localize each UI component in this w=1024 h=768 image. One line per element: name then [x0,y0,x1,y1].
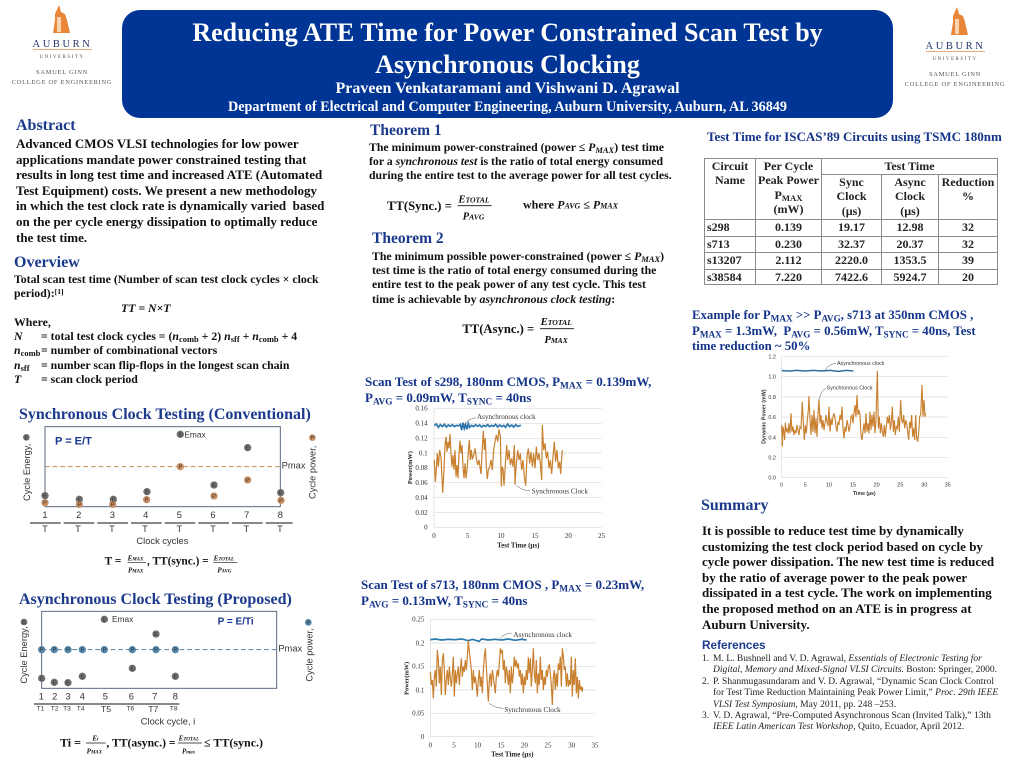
text: abstract body: applications mandate power constrained testing that [16,152,306,167]
chart: synchronous clock schematic: E [43,494,47,500]
chart: asynchronous clock schematic: E [22,620,26,626]
formula: sync test time: EMAX [127,554,144,562]
table: test time results: (mW) [774,202,804,216]
text: abstract body: in which the test clock rate is dynamically varied based [16,198,324,213]
line: async clock [430,639,527,641]
heading: s298 scan test: PAVG = 0.09mW, TSYNC = 40ns [365,390,531,407]
chart: s298 power vs time: 0.16 [415,405,428,413]
text: abstract body [16,136,324,245]
chart: asynchronous clock schematic: E [173,674,177,680]
chart: synchronous clock schematic: 5 [177,510,182,520]
chart: synchronous clock schematic: P [279,498,283,504]
text: abstract body: Advanced CMOS VLSI technologies for low power [16,136,299,151]
table: test time results: 32 [962,237,974,251]
text: summary body: by the ratio of average power to the peak power [702,570,967,585]
chart: s298 power vs time: 0.04 [415,494,428,502]
text: theorem 2 body: test time is the ratio of total energy consumed during the [372,263,656,277]
text: theorem 1 body: during the entire test to the average power for all test cycles. [369,168,672,182]
chart: synchronous clock schematic: P [111,502,115,508]
heading: Theorem 2: Theorem 2 [372,230,444,247]
chart: asynchronous clock schematic: T4 [77,705,85,712]
chart: dynamic power vs time: 15 [850,483,856,489]
table: test time results: PMAX [775,188,802,203]
formula: theorem 1: PAVG [463,212,485,223]
table: test time results: Async [894,175,926,189]
chart: synchronous clock schematic: 6 [210,510,216,520]
chart: asynchronous clock schematic: E [154,632,158,638]
table: test time results: Clock [895,189,925,203]
formula: theorem 1 [387,194,619,223]
authors: Praveen Venkataramani and Vishwani D. Agrawal [335,80,680,97]
chart: synchronous clock schematic: Cycle power, [308,446,318,499]
formula: theorem 2: PMAX [544,335,569,346]
formula: theorem 1: where PAVG ≤ PMAX [523,197,619,211]
chart: synchronous clock schematic: P [77,502,81,508]
table: test time results: Per Cycle [764,159,813,173]
chart: synchronous clock schematic: 4 [143,510,148,520]
chart: dynamic power vs time: 0.0 [768,475,776,481]
table: test time results: 1353.5 [894,253,926,267]
text: summary body [702,523,994,632]
chart: asynchronous clock schematic: E [102,617,106,623]
chart: s298 power vs time: 0.14 [415,420,428,428]
chart: s298 power vs time: 0.06 [415,479,428,487]
text: theorem 2 body [372,249,664,306]
line: async clock [782,370,853,371]
chart: s298 power vs time: 15 [532,532,539,540]
chart: s713 power vs time: 15 [498,742,505,750]
text: theorem 1 body: The minimum power-constrained (power ≤ PMAX) test time [369,140,664,155]
formula: sync test time: PAVG [217,566,232,574]
chart: dynamic power vs time: 20 [874,483,880,489]
chart: asynchronous clock schematic: P [52,648,56,654]
chart: asynchronous clock schematic: Pmax [278,643,303,653]
logo: Auburn University right [905,7,1005,88]
logo: Auburn University right: UNIVERSITY [932,57,978,62]
chart: synchronous clock schematic: P = E/T [55,435,92,447]
chart: s298 power vs time: 10 [498,532,505,540]
chart: synchronous clock schematic: T [109,524,115,534]
chart: dynamic power vs time: 25 [897,483,903,489]
text: references list: 1. [702,653,709,664]
title: Asynchronous Clocking [375,50,640,79]
text: abstract body: the test time. [16,230,87,245]
chart: dynamic power vs time: 30 [921,483,927,489]
chart: synchronous clock schematic: P [310,436,314,442]
chart: s713 power vs time: 5 [452,742,456,750]
heading: synchronous clock testing: Synchronous Clock Testing (Conventional) [19,406,311,423]
table: test time results: Name [715,173,745,187]
chart: dynamic power vs time: Synchronous Clock [827,385,873,391]
chart: asynchronous clock schematic [19,610,315,755]
chart: dynamic power vs time: 0.4 [768,435,776,441]
text: references list: VLSI Test Symposium, May 2011, pp. 248 –253. [713,699,896,710]
formula: theorem 1: TT(Sync.) = [387,199,452,213]
formula: async test time: ETOTAL [178,734,199,742]
chart: asynchronous clock schematic: Cycle Energy, [19,626,29,684]
chart: synchronous clock schematic: P [145,498,149,504]
chart: asynchronous clock schematic: P [66,648,70,654]
chart: synchronous clock schematic: E [145,490,149,496]
table: test time results: (µs) [900,204,920,218]
chart: asynchronous clock schematic: Clock cycle, i [141,716,195,726]
chart: asynchronous clock schematic: 2 [52,691,57,701]
heading: asynchronous clock testing: Asynchronous Clock Testing (Proposed) [19,591,292,608]
chart: dynamic power vs time: 0.2 [768,455,776,461]
chart: synchronous clock schematic: T [42,524,48,534]
chart: dynamic power vs time: 0.6 [768,415,776,421]
heading: s713 scan test [361,577,644,610]
chart: s298 power vs time: Asynchronous clock [477,413,536,421]
chart: synchronous clock schematic: T [210,524,216,534]
chart: asynchronous clock schematic: T2 [51,705,59,712]
table: test time results: % [962,189,974,203]
chart: synchronous clock schematic: P [212,494,216,500]
chart: asynchronous clock schematic: T7 [148,704,159,714]
chart: synchronous clock schematic: Emax [184,430,206,440]
formula: async test time: Pmax [182,747,196,755]
chart: s713 power vs time: 35 [592,742,599,750]
logo: Auburn University left: UNIVERSITY [40,55,84,60]
chart: asynchronous clock schematic: 4 [80,691,85,701]
text: abstract body: on the per cycle energy dissipation to optimally reduce [16,214,317,229]
text: overview body: = number scan flip-flops in the longest scan chain [41,358,289,372]
chart: asynchronous clock schematic: E [80,674,84,680]
affiliation: Department of Electrical and Computer Engineering, Auburn University, Auburn, AL 36849 [228,99,787,115]
table: test time results [704,158,998,285]
chart: s713 power vs time: Synchronous Clock [504,706,561,714]
formula: theorem 2: ETOTAL [540,317,572,328]
table: test time results: s38584 [707,270,742,284]
chart: asynchronous clock schematic: E [130,666,134,672]
text: theorem 2 body: entire test to the peak power of any test cycle. This test [372,277,646,291]
chart: asynchronous clock schematic: 8 [173,691,178,701]
chart: s298 power vs time: Synchronous Clock [532,487,588,495]
chart: asynchronous clock schematic: T5 [101,704,111,714]
chart: s713 power vs time: 0.2 [416,639,425,647]
chart: dynamic power vs time [762,354,951,497]
heading: PMAX example [692,308,976,353]
table: test time results: 0.230 [775,237,802,251]
chart: dynamic power vs time: Time (µs) [853,491,876,497]
text: summary body: cycle power dissipation. The new test time is reduced [702,554,994,569]
chart: asynchronous clock schematic: P = E/Ti [218,616,254,627]
chart: asynchronous clock schematic: 7 [152,691,157,701]
chart: s713 power vs time: Asynchronous clock [513,631,572,639]
chart: synchronous clock schematic: 3 [110,510,115,520]
chart: asynchronous clock schematic: P [154,648,158,654]
logo: Auburn University left [12,5,112,86]
chart: asynchronous clock schematic: P [306,620,310,626]
formula: async test time: Ei [91,734,99,742]
heading: test time table title: Test Time for ISCAS’89 Circuits using TSMC 180nm [707,129,1002,144]
chart: s298 power vs time: 25 [598,532,606,540]
chart: asynchronous clock schematic: P [80,648,84,654]
text: theorem 1 body [369,140,672,182]
chart: asynchronous clock schematic: 3 [65,691,71,701]
table: test time results: 0.139 [775,220,802,234]
table: test time results: Reduction [942,175,994,189]
chart: dynamic power vs time: 35 [945,483,951,489]
heading: PMAX example: Example for PMAX >> PAVG, s713 at 350nm CMOS , [692,308,973,323]
formula: async test time: , TT(async.) = [106,737,176,750]
logo: Auburn University left: SAMUEL GINN [36,69,88,76]
logo: Auburn University left: AUBURN [33,39,92,50]
chart: s298 power vs time: 0 [432,532,436,540]
chart: s713 power vs time: Power(mW) [404,662,411,695]
chart: s713 power vs time: 30 [568,742,576,750]
chart: asynchronous clock schematic: 6 [129,691,134,701]
formula: sync test time [105,554,237,574]
chart: asynchronous clock schematic: T3 [63,705,71,712]
table: test time results: Clock [836,189,866,203]
table: test time results: 2.112 [775,253,802,267]
text: theorem 1 body: for a synchronous test is the ratio of total energy consumed [369,154,663,168]
chart: s298 power vs time: 0.08 [415,464,428,472]
formula: sync test time: PMAX [128,566,144,574]
table: test time results: 20 [962,270,974,284]
text: summary body: dissipated in a test cycle. The work on implementing [702,585,992,600]
table: test time results: 20.37 [896,237,924,251]
chart: synchronous clock schematic: Clock cycles [136,536,189,546]
table: test time results: 12.98 [896,220,924,234]
line: sync clock [782,371,926,447]
text: overview body: = number of combinational vectors [41,343,217,357]
heading: Overview: Overview [14,254,80,271]
text: references list: IEEE Latin American Test Workshop, Quito, Ecuador, April 2012. [713,721,964,732]
chart: dynamic power vs time: 0 [780,483,783,489]
text: summary body: customizing the test clock period based on cycle by [702,539,983,554]
table: test time results: 7422.6 [835,270,868,284]
text: references list: 3. [702,710,709,721]
table: test time results: Test Time [884,159,935,173]
text: overview body: nsff [14,358,30,373]
formula: sync test time: T = [105,556,121,568]
chart: synchronous clock schematic: E [279,491,283,497]
table: test time results: 19.17 [838,220,865,234]
chart: s298 power vs time: 0.1 [419,449,428,457]
chart: synchronous clock schematic: T [142,524,148,534]
heading: PMAX example: time reduction ~ 50% [692,339,810,353]
chart: s298 power vs time: 0.02 [415,509,428,517]
chart: synchronous clock schematic: T [277,524,283,534]
text: overview body: period):[1] [14,286,64,300]
chart: s713 power vs time: 25 [544,742,552,750]
chart: synchronous clock schematic: 2 [76,510,81,520]
chart: asynchronous clock schematic: P [40,648,44,654]
chart: s298 power vs time: 20 [565,532,572,540]
line: async clock [434,423,521,430]
table: test time results: s13207 [707,253,742,267]
formula: sync test time: ETOTAL [213,554,234,562]
chart: synchronous clock schematic: P [178,465,182,471]
chart: synchronous clock schematic: E [246,446,250,452]
title: Reducing ATE Time for Power Constrained Scan Test by [192,18,823,47]
table: test time results: Sync [839,175,864,189]
chart: synchronous clock schematic: E [77,497,81,503]
text: overview body: N [14,329,23,343]
heading: Theorem 1: Theorem 1 [370,122,442,139]
logo: Auburn University right: AUBURN [926,41,985,52]
chart: synchronous clock schematic: E [24,435,28,441]
text: abstract body: results in long test time and increased ATE (Automated [16,167,322,182]
logo: Auburn University right: SAMUEL GINN [929,71,981,78]
table: test time results: 32 [962,220,974,234]
formula: async test time: PMAX [87,747,103,755]
chart: asynchronous clock schematic: E [52,680,56,686]
text: summary body: It is possible to reduce test time by dynamically [702,523,964,538]
text: references list: for Test Time Reduction Maintaining Peak Power Limit,” Proc. 29th IEEE [713,687,998,698]
logo: Auburn University right: COLLEGE OF ENGINEERING [905,81,1005,88]
table: test time results: Peak Power [758,173,819,187]
text: overview body: Where, [14,315,51,329]
formula: async test time [60,734,263,755]
chart: synchronous clock schematic: 7 [244,510,249,520]
chart: asynchronous clock schematic: P [173,648,177,654]
chart: dynamic power vs time: 0.8 [768,395,776,401]
chart: s298 power vs time [407,405,606,550]
table: test time results: 39 [962,253,974,267]
chart: asynchronous clock schematic: 1 [39,691,44,701]
chart: s713 power vs time: 0 [429,742,433,750]
text: summary body: Auburn University. [702,617,810,632]
text: summary body: the proposed method on an ATE is in progress at [702,601,972,616]
chart: s713 power vs time: 0.05 [412,710,425,718]
formula: async test time: Ti = [60,736,81,750]
chart: s298 power vs time: 0 [424,524,428,532]
chart: synchronous clock schematic: E [212,483,216,489]
chart: synchronous clock schematic: E [178,432,182,438]
chart: asynchronous clock schematic: E [66,681,70,687]
table: test time results: s298 [707,220,730,234]
chart: s298 power vs time: Power(mW) [407,451,414,484]
chart: asynchronous clock schematic: E [40,676,44,682]
chart: s298 power vs time: 5 [466,532,470,540]
heading: s298 scan test: Scan Test of s298, 180nm CMOS, PMAX = 0.139mW, [365,374,651,391]
chart: synchronous clock schematic: T [243,524,249,534]
heading: s298 scan test [365,374,651,407]
chart: s713 power vs time [404,616,599,759]
heading: References: References [702,638,766,652]
formula: theorem 1: ETOTAL [457,194,490,205]
text: overview body [14,272,319,386]
chart: synchronous clock schematic: 1 [42,510,48,520]
table: test time results: 5924.7 [894,270,926,284]
line: sync clock [430,641,583,705]
text: overview body: Total scan test time (Number of scan test clock cycles × clock [14,272,319,286]
text: references list: 2. [702,676,709,687]
formula: sync test time: , TT(sync.) = [147,556,209,568]
text: theorem 2 body: time is achievable by asynchronous clock testing: [372,292,615,306]
chart: asynchronous clock schematic: P [130,648,134,654]
chart: asynchronous clock schematic: T6 [126,705,135,712]
formula: theorem 2: TT(Async.) = [462,322,534,336]
text: overview body: TT = N×T [121,301,170,315]
chart: synchronous clock schematic: 8 [278,510,283,520]
chart: synchronous clock schematic: Cycle Energy, [22,444,32,501]
chart: s713 power vs time: 20 [521,742,528,750]
chart: dynamic power vs time: 1.2 [768,355,776,361]
table: test time results: s713 [707,237,730,251]
formula: theorem 2 [462,317,574,346]
chart: asynchronous clock schematic: Emax [112,614,134,624]
chart: s713 power vs time: 0 [421,733,425,741]
chart: dynamic power vs time: Asynchronous clock [837,361,885,367]
chart: asynchronous clock schematic: 5 [103,691,108,701]
chart: s713 power vs time: Test Time (µs) [491,751,534,759]
heading: PMAX example: PMAX = 1.3mW, PAVG = 0.56mW, TSYNC = 40ns, Test [692,324,976,339]
logo: Auburn University left: COLLEGE OF ENGINEERING [12,79,112,86]
text: abstract body: Test Equipment) costs. We present a new methodology [16,183,317,198]
chart: dynamic power vs time: 1.0 [768,375,776,381]
text: references list [702,653,998,732]
chart: synchronous clock schematic: P [43,501,47,507]
text: overview body: = total test clock cycles = (ncomb + 2) nsff + ncomb + 4 [41,329,297,344]
chart: asynchronous clock schematic: Cycle power, [305,628,315,682]
table: test time results: 7.220 [775,270,802,284]
chart: asynchronous clock schematic: P [102,648,106,654]
chart: dynamic power vs time: 10 [826,483,832,489]
formula: async test time: ≤ TT(sync.) [204,736,263,750]
text: overview body: T [14,372,21,386]
chart: synchronous clock schematic: E [111,497,115,503]
chart: s713 power vs time: 0.15 [412,663,425,671]
table: test time results: Circuit [712,159,748,173]
table: test time results: 32.37 [838,237,865,251]
title [192,18,823,79]
heading: s713 scan test: Scan Test of s713, 180nm CMOS , PMAX = 0.23mW, [361,577,644,594]
chart: dynamic power vs time: 5 [804,483,807,489]
text: overview body: ncomb [14,343,40,359]
chart: synchronous clock schematic: P [246,478,250,484]
chart: s713 power vs time: 0.1 [416,686,425,694]
text: references list: P. Shanmugasundaram and V. D. Agrawal, “Dynamic Scan Clock Control [713,676,994,687]
heading: Summary: Summary [701,497,769,514]
chart: synchronous clock schematic: T [75,524,81,534]
chart: s713 power vs time: 0.25 [412,616,425,624]
chart: dynamic power vs time: Dynamic Power (mW) [762,389,768,444]
text: references list: V. D. Agrawal, “Pre-Computed Asynchronous Scan (Invited Talk),” 13th [713,710,991,721]
line: sync clock [434,425,562,493]
table: test time results: (µs) [842,204,861,218]
chart: asynchronous clock schematic: T1 [36,705,45,712]
chart: s298 power vs time: 0.12 [415,435,428,443]
text: references list: M. L. Bushnell and V. D. Agrawal, Essentials of Electronic Testing for [713,653,982,664]
text: overview body: = scan clock period [41,372,138,386]
chart: synchronous clock schematic: Pmax [282,460,306,470]
chart: synchronous clock schematic: T [176,524,182,534]
heading: Abstract: Abstract [16,117,76,134]
heading: s713 scan test: PAVG = 0.13mW, TSYNC = 40ns [361,592,527,610]
chart: s713 power vs time: 10 [474,742,482,750]
chart: asynchronous clock schematic: T8 [170,705,178,712]
chart: s298 power vs time: Test Time (µs) [497,542,540,550]
text: theorem 2 body: The minimum possible power-constrained (power ≤ PMAX) [372,249,664,264]
title banner [122,10,893,118]
table: test time results: 2220.0 [835,253,868,267]
chart: synchronous clock schematic [22,426,318,574]
text: references list: Digital, Memory and Mixed-Signal VLSI Circuits. Boston: Springer, 2000. [713,664,997,675]
